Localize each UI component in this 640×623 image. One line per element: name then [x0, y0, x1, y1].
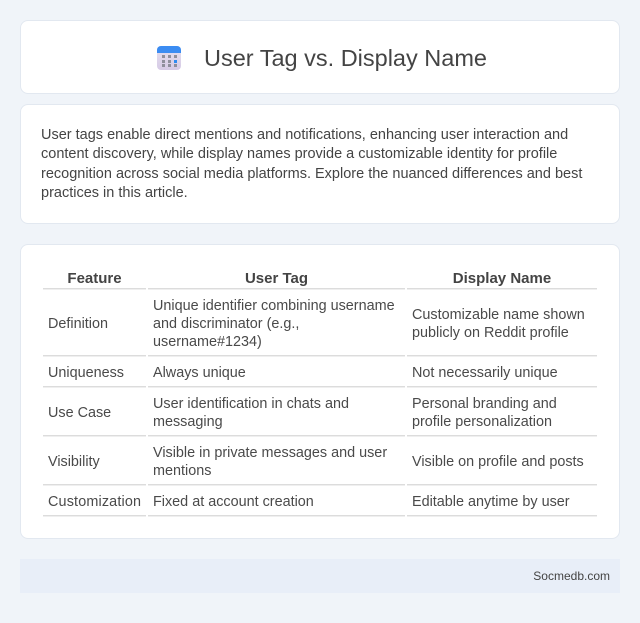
table: Customization: [48, 494, 141, 510]
table: Personal branding and: [412, 396, 557, 412]
intro text: practices in this article.: [41, 185, 188, 201]
table: Use Case: [48, 405, 111, 421]
table: User identification in chats and: [153, 396, 349, 412]
intro text: content discovery, while display names provide a customizable identity for profile: [41, 146, 557, 162]
panel: comparison table: [20, 244, 620, 539]
table: Visible on profile and posts: [412, 454, 584, 470]
table: Feature: [67, 270, 122, 287]
table: Customizable name shown: [412, 307, 585, 323]
table: Definition: [48, 316, 108, 332]
table: Fixed at account creation: [153, 494, 314, 510]
table: Always unique: [153, 365, 246, 381]
intro text: User tags enable direct mentions and notifications, enhancing user interaction and: [41, 127, 568, 143]
table: Unique identifier combining username: [153, 298, 395, 314]
table: Visible in private messages and user: [153, 445, 387, 461]
table: [43, 270, 597, 517]
table: publicly on Reddit profile: [412, 325, 569, 341]
table: and discriminator (e.g.,: [153, 316, 299, 332]
table: Display Name: [453, 270, 551, 287]
table: messaging: [153, 414, 223, 430]
table: username#1234): [153, 334, 262, 350]
table: User Tag: [245, 270, 308, 287]
table: Uniqueness: [48, 365, 124, 381]
table: mentions: [153, 463, 211, 479]
title: User Tag vs. Display Name: [204, 45, 487, 71]
table: Editable anytime by user: [412, 494, 570, 510]
table: Not necessarily unique: [412, 365, 558, 381]
panel: header: [20, 20, 620, 94]
panel: intro: [20, 104, 620, 224]
icon: calendar: [157, 46, 181, 70]
footer text: Socmedb.com: [533, 569, 610, 583]
table: profile personalization: [412, 414, 552, 430]
footer bar: [20, 559, 620, 593]
intro text: [41, 127, 582, 201]
table: Visibility: [48, 454, 100, 470]
intro text: recognition across social media platforms. Explore the nuanced differences and best: [41, 166, 582, 182]
